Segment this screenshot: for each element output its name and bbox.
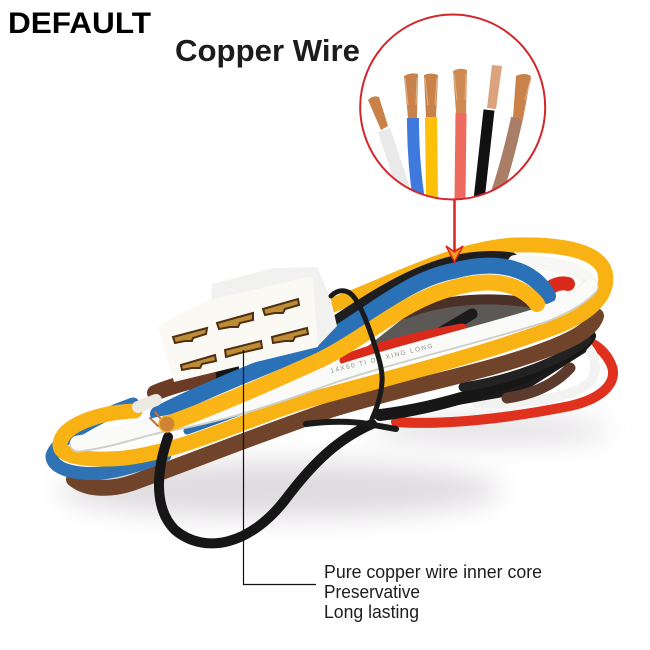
connector front face: [158, 277, 318, 382]
feature 3: Long lasting: [324, 602, 419, 622]
heading: Copper Wire: Copper Wire: [175, 33, 360, 68]
sample: brown wire: [496, 74, 531, 195]
wire: white top arc: [515, 262, 590, 288]
sample: black wire: [479, 65, 502, 200]
wire: yellow inner with cut end: [170, 283, 537, 423]
wire: black bundle: [380, 336, 590, 415]
wire: brown main: [74, 316, 596, 488]
wire: inner brown loop: [507, 368, 570, 398]
cable tie: [331, 291, 382, 419]
connector block: [158, 267, 337, 382]
sample: coral wire: [453, 69, 467, 200]
wire: red inner: [345, 329, 462, 360]
connector back: [210, 267, 337, 347]
wire: brown top end: [155, 376, 208, 393]
exposed copper strands: [150, 412, 160, 426]
watermark: DEFAULT: DEFAULT: [8, 7, 151, 40]
feature list: [324, 562, 542, 622]
wire: outer red loop: [396, 344, 613, 423]
wire: inner dark brown: [405, 299, 538, 314]
wire: upper black: [337, 256, 512, 320]
soft floor shadow: [60, 418, 610, 518]
wire: short black end: [440, 314, 472, 333]
dark interior: [368, 295, 545, 358]
sample: white wire: [368, 96, 404, 190]
lower bundle backing: [400, 335, 590, 412]
wire: black arc behind connector: [187, 368, 235, 398]
wire: blue lower strip: [187, 390, 297, 431]
wire: blue left loop: [52, 404, 165, 474]
sample: yellow wire: [424, 74, 438, 200]
wire: blue main: [158, 266, 548, 414]
cable tie head: [306, 422, 396, 429]
sample: blue wire: [404, 73, 419, 200]
cut copper end: [159, 416, 175, 432]
wire: white main: [78, 286, 590, 443]
callout circle: stripped wire samples: [360, 14, 545, 200]
wire: white main edge: [78, 287, 590, 444]
wire: white stripped end: [138, 400, 156, 407]
leader line: [244, 350, 316, 584]
wire: inner white loop: [477, 347, 595, 403]
printed marking on white wire: 14X60 TI DE XING LONG: [330, 342, 435, 375]
red arrow: [446, 200, 463, 262]
wire: outer yellow: [60, 245, 606, 459]
feature 1: Pure copper wire inner core: [324, 562, 542, 582]
wire: red back patch: [545, 283, 568, 292]
wire harness: [52, 245, 613, 543]
wire: black hanging loop: [159, 424, 372, 543]
feature 2: Preservative: [324, 582, 420, 602]
red ring: [360, 14, 545, 200]
contacts: [173, 299, 308, 370]
